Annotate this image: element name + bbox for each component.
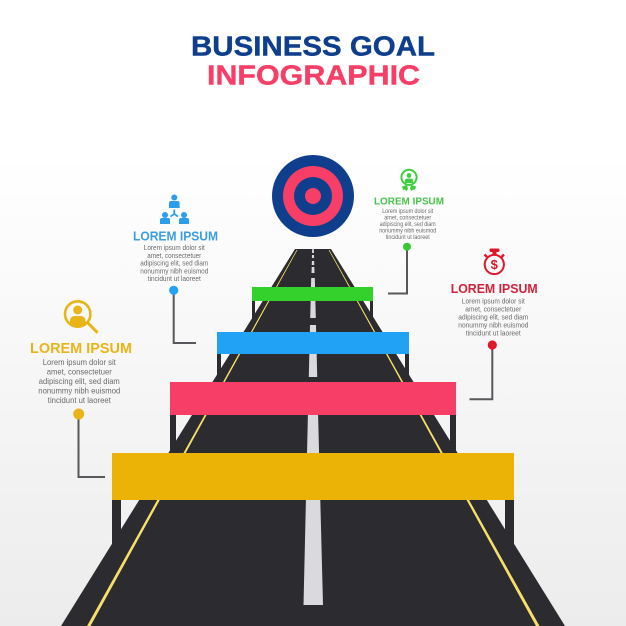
body text: tincidunt ut laoreet (148, 274, 201, 283)
body text: tincidunt ut laoreet (48, 395, 111, 405)
hurdle: green (252, 287, 373, 318)
left yellow road line (87, 250, 297, 626)
callout: green (374, 170, 444, 294)
body text: nonummy nibh euismod (140, 266, 208, 275)
body text: adipiscing elit, sed diam (380, 222, 436, 228)
title: INFOGRAPHIC (207, 60, 420, 90)
right yellow road line (329, 250, 540, 626)
body text: amet, consectetuer (384, 215, 431, 221)
callout: blue (133, 194, 218, 343)
icon: medal with person (401, 170, 417, 191)
body text: tincidunt ut laoreet (466, 329, 521, 338)
hurdle: pink (170, 382, 456, 453)
icon: stopwatch with dollar (484, 248, 504, 274)
body text: amet, consectetuer (147, 251, 202, 260)
body text: nonummy nibh euismod (458, 321, 528, 330)
callout: yellow (30, 301, 132, 477)
hurdle: blue (217, 332, 409, 375)
body text (458, 297, 528, 338)
centre road stripes (304, 249, 323, 605)
body text: adipiscing elit, sed diam (140, 259, 208, 268)
title: BUSINESS GOAL (191, 30, 435, 62)
connector pin (470, 340, 497, 399)
body text: Lorem ipsum dolor sit (382, 209, 433, 215)
connector pin (73, 408, 105, 477)
body text: amet, consectetuer (47, 366, 112, 376)
body text: adipiscing elit, sed diam (458, 313, 528, 322)
icon: team (160, 194, 189, 224)
body text (38, 357, 120, 405)
body text: tincidunt ut laoreet (386, 235, 430, 241)
target icon (272, 155, 354, 237)
heading: LOREM IPSUM (30, 341, 132, 357)
body text: adipiscing elit, sed diam (39, 376, 120, 386)
hurdle: yellow (112, 453, 514, 545)
connector pin (169, 286, 196, 343)
callout: red (451, 248, 538, 399)
icon: magnifier with person (65, 301, 98, 333)
body text (140, 243, 208, 283)
road (61, 249, 565, 626)
connector pin (388, 243, 411, 294)
heading: LOREM IPSUM (133, 228, 218, 243)
body text: nonummy nibh euismod (38, 386, 120, 396)
heading: LOREM IPSUM (451, 281, 538, 296)
body text: amet, consectetuer (465, 305, 522, 314)
icon: stopwatch with dollar: $ (491, 257, 499, 272)
body text: Lorem ipsum dolor sit (43, 357, 116, 367)
body text: nonummy nibh euismod (379, 229, 436, 235)
title (191, 30, 435, 90)
heading: LOREM IPSUM (374, 197, 444, 208)
body text: Lorem ipsum dolor sit (462, 297, 525, 306)
body text (379, 209, 436, 241)
body text: Lorem ipsum dolor sit (144, 243, 205, 252)
